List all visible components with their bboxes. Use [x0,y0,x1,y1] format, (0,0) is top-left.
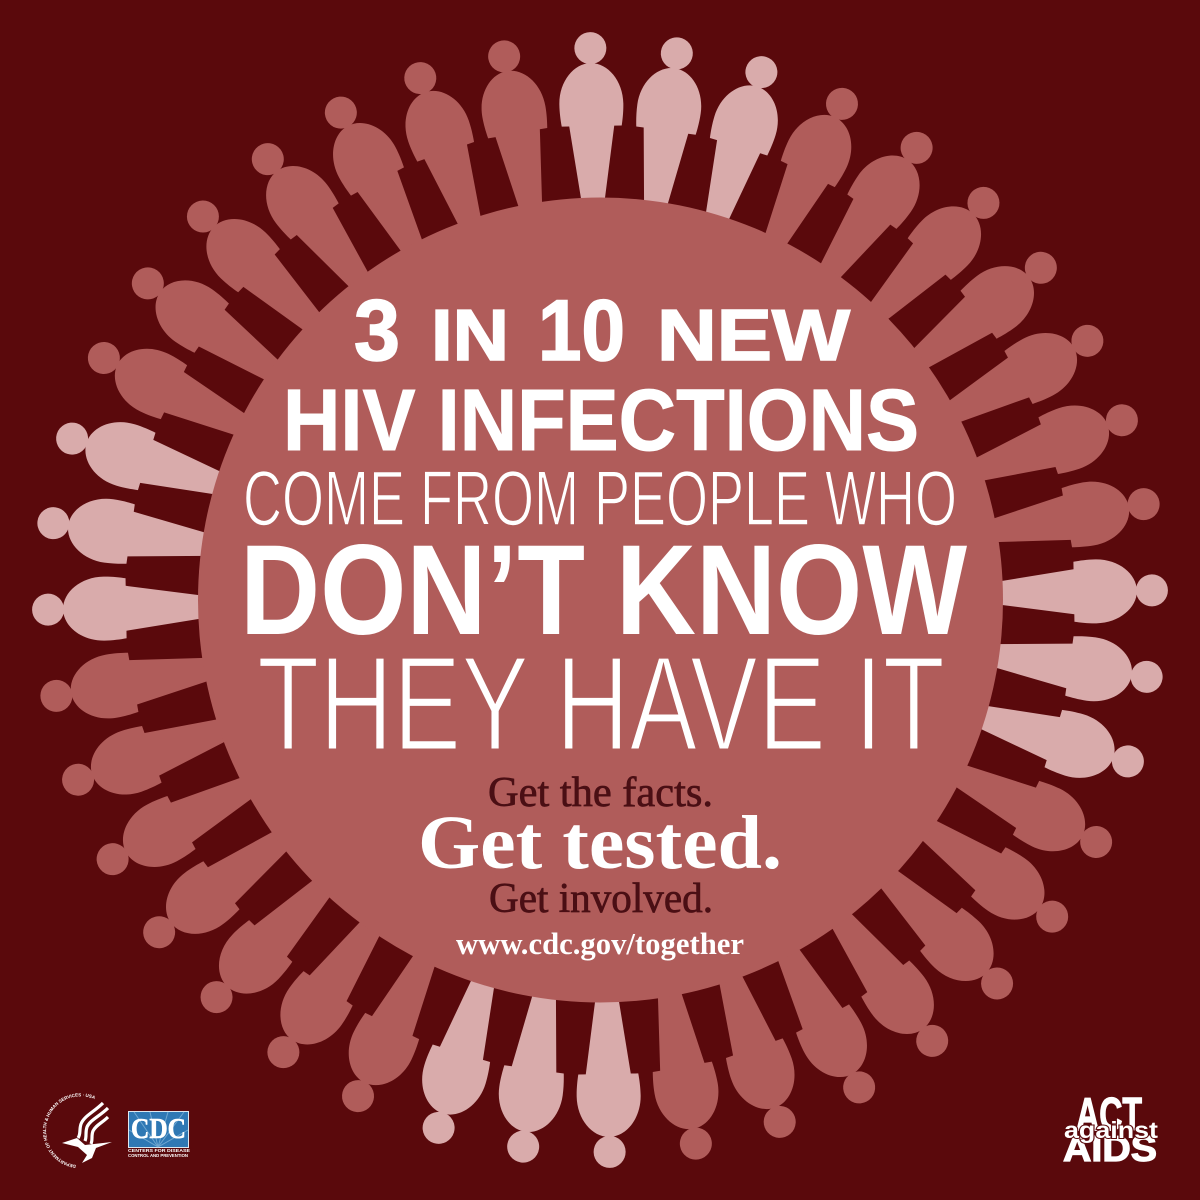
headline line: HIV infections: HIV INFECTIONS [283,372,919,469]
logo: Act against AIDS [1063,1088,1158,1169]
people group: left highlighted [32,403,232,642]
headline [240,283,967,779]
seal eagle [62,1103,112,1163]
headline line: 3 in 10 new: 3 [354,283,400,379]
logo word: against: against [1064,1117,1158,1143]
call to action [418,770,782,961]
CDC rays [129,1112,188,1147]
CDC caption: CENTERS FOR DISEASE [128,1148,190,1153]
people group: top highlighted [558,32,797,232]
text: website: www.cdc.gov/together [456,926,744,961]
people group: lower right [637,744,1125,1165]
text: get the facts: Get the facts. [488,770,713,816]
people group: upper left [75,35,563,456]
logo word: ACT: ACT [1076,1088,1142,1140]
text: get involved: Get involved. [489,876,713,922]
text: get tested: Get tested. [418,801,782,885]
CDC letters: CDC [131,1113,186,1145]
headline line: don't know: DON’T KNOW [240,519,967,662]
people group: lower left [35,637,456,1125]
logo: CDC [128,1112,190,1158]
CDC blue box [128,1112,188,1148]
headline line: 3 in 10 new: IN [431,296,509,376]
headline line: 3 in 10 new: NEW [657,296,850,376]
people group: upper right [744,75,1165,563]
logo: HHS seal [42,1093,112,1168]
people group: bottom highlighted [403,968,642,1168]
central circle [198,198,1003,1002]
headline line: they have it: THEY HAVE IT [257,628,945,779]
CDC caption second line: CONTROL AND PREVENTION [128,1153,188,1158]
seal circular text: DEPARTMENT OF HEALTH & HUMAN SERVICES · USA [42,1093,94,1168]
headline line: 3 in 10 new: 10 [538,283,625,379]
people group: right highlighted [968,558,1168,797]
logo word: AIDS: AIDS [1063,1128,1157,1169]
